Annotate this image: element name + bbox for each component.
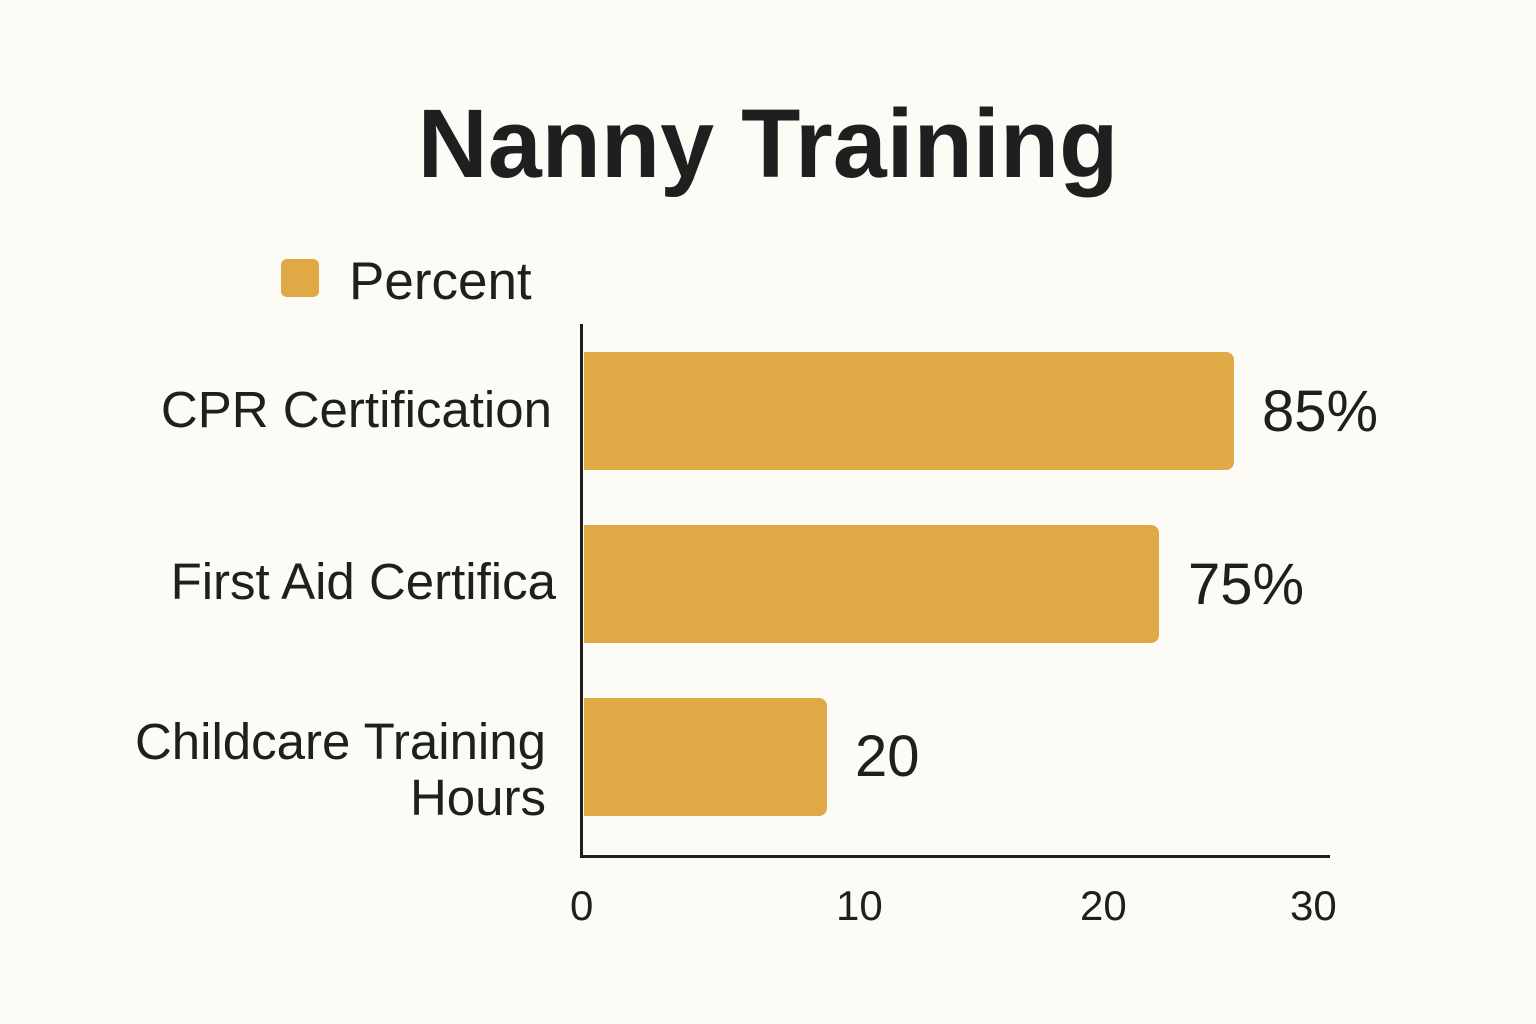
bar: First Aid: [584, 525, 1159, 643]
value: 20: 20: [855, 724, 920, 789]
chart: 20: [1080, 882, 1127, 929]
title: Nanny Training: [418, 89, 1118, 198]
label: Childcare: Hours: [410, 769, 546, 826]
legend swatch: [281, 259, 319, 297]
legend: [281, 252, 532, 311]
ticks: 0: [570, 882, 593, 929]
chart: 10: [836, 882, 883, 929]
label: Childcare: Childcare Training: [135, 713, 546, 770]
label: First Aid: First Aid Certifica: [171, 553, 556, 610]
legend label: Percent: [349, 252, 532, 311]
label: Childcare: [135, 713, 546, 826]
chart: [135, 324, 1378, 929]
axes: [580, 324, 583, 858]
bar: Childcare: [584, 698, 827, 816]
label: CPR: CPR Certification: [161, 381, 552, 438]
chart: 30: [1290, 882, 1337, 929]
value: 75%: 75%: [1188, 552, 1304, 617]
value: 85%: 85%: [1262, 379, 1378, 444]
bar: CPR: [584, 352, 1234, 470]
